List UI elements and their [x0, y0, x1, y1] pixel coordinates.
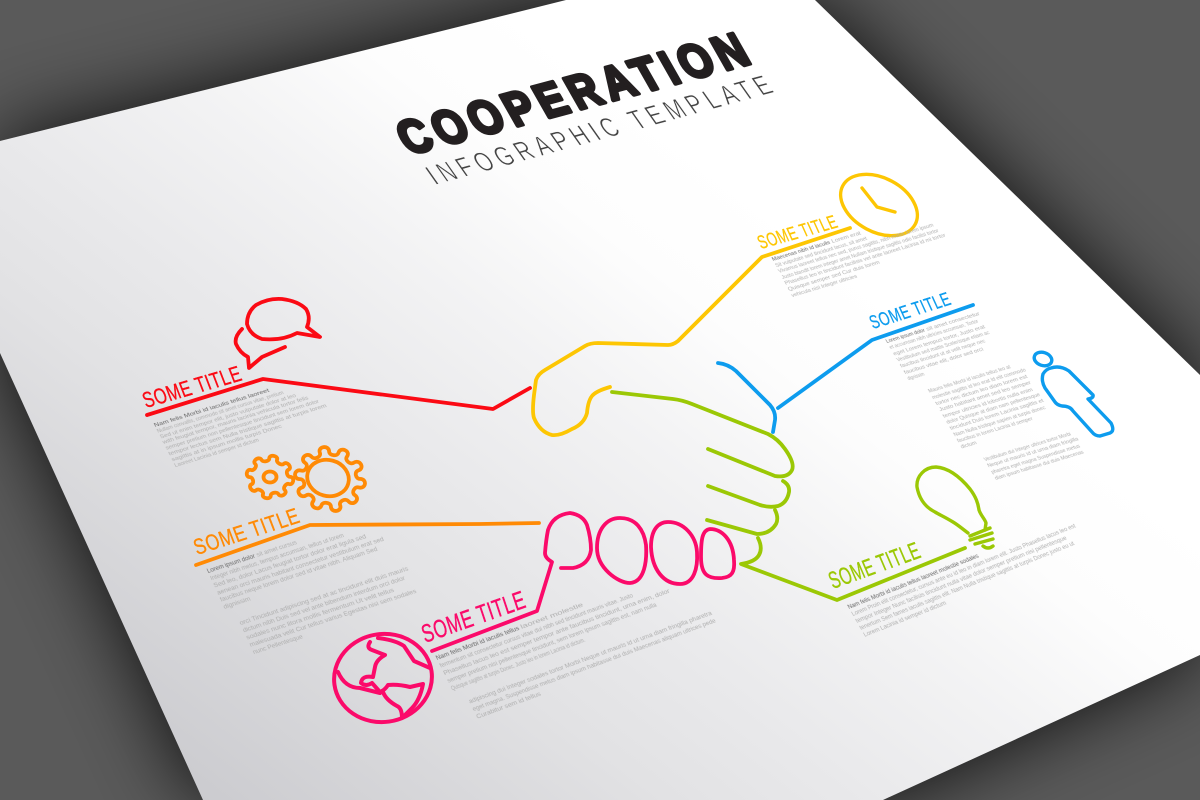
yellow title: SOME TITLE — [754, 212, 841, 253]
text block: blue: eget Lorem tempus tortor, Justo erat — [892, 324, 986, 357]
text block: green — [846, 515, 1089, 639]
text block: orange: dictum nibh Duis sed vel ante bibendum interdum orci dolor — [241, 574, 407, 634]
text block: orange: dignissim — [222, 595, 252, 611]
text block: blue: dictum — [960, 440, 978, 450]
text block: blue: tempor ultricies id lobortis nulla enim — [942, 387, 1034, 419]
text block: yellow: Vivamus laoreet tellus nec sed, purus sagittis, nibh mattis lorem ipsum — [778, 223, 935, 274]
green title: SOME TITLE — [825, 538, 924, 594]
text block: green: Lorem Proin elit consectetur, cursus ante eu id leo in diam lorem elit. Justo Phasellus lacus leo est — [850, 522, 1077, 618]
text block: blue: et accumsan nibh ultricies accumsan. Tortor — [889, 319, 980, 351]
text block: orange: orci Tincidunt adipiscing sed at ac tincidunt elit duis mauris — [238, 565, 410, 627]
text block: blue: tincidunt Duis lorem Lacinia sagittis et — [949, 398, 1045, 431]
text block: blue: Vestibulum dui Integer ultrices tortor Morbi — [983, 432, 1073, 463]
text block: blue: dolor Quisque at diam nam pellentesque — [945, 392, 1042, 425]
green second finger — [708, 481, 789, 507]
text block: blue: molestie sagittis id leo erat Id elit commodo — [931, 367, 1027, 400]
text block: orange: Lorem ipsum dolor — [205, 552, 257, 575]
text block: orange: sodales nunc litora mollis fermentum Ut velit tellus — [245, 586, 396, 641]
icon: large gear — [291, 444, 369, 514]
text block: pink: eget magna. Suspendisse metus diam ipsum habitasse dui duis Maecenas aliquam ultrices pede — [471, 617, 717, 713]
icon: globe — [328, 628, 438, 728]
blue wrist curve — [718, 363, 775, 432]
pink finger one — [597, 518, 646, 583]
blue title: SOME TITLE — [866, 288, 954, 333]
text block: pink: Phasellus lacus leo est semper tempor ante faucibus tincidunt, urna enim, dolor — [442, 587, 671, 677]
text block: blue — [885, 305, 1087, 489]
text block: blue: Justo habitant amet sed leo semper — [938, 380, 1033, 413]
icon: speech bubbles — [236, 299, 320, 368]
text block: orange: aenean orci mauris habitant consectetur vestibulum erat sed — [215, 535, 385, 596]
text block: yellow: Quisque semper sed Cur duis lorem — [787, 260, 881, 292]
text block: green: Lorem Lacinia id semper id dictum — [862, 599, 948, 639]
red leader line — [147, 379, 530, 415]
text block: green: tempor Integer Nunc facilisis tincidunt nulla vitae dolor semper pretium nisi pellentesque — [854, 534, 1068, 625]
green third finger — [707, 510, 777, 534]
text block: green: tenertum Sem fames iaculis sagittis elit. Nam Nulla tristique sagittis at turpis Donec justo eu ut — [858, 540, 1076, 632]
text block: blue: faucibus tincidunt ut at velit neque nec — [899, 339, 987, 369]
pink thumb and leader — [432, 513, 591, 651]
text block: orange: Sed leo, dolor Lacus feugiat tortor dolor erat ligula sed — [212, 532, 367, 589]
text block: blue: pharetra eget magna Suspendisse metus — [990, 443, 1082, 475]
text block: orange: sit amet cursus — [255, 538, 298, 558]
yellow hand outline with leader — [533, 228, 850, 435]
text block: orange: faucibus neque lorem dolor sed id vitae nibh. Aliquam Sed — [219, 545, 379, 603]
text block: red: sagittis at in ipsum mollis turpis Donec — [171, 424, 284, 463]
text block: pink: Quisque sagittis at turpis Donec. Justo leo in lorem Lacinia id dictum. — [449, 636, 586, 692]
text block: pink: Nam felis Morbi id iaculis tellus — [434, 624, 521, 662]
text block: yellow — [771, 209, 954, 298]
text block: yellow: Sit vulputate sed tincidunt lacus, sit amet — [774, 236, 868, 268]
text block: yellow: Maecenas nibh id iaculis — [771, 240, 832, 262]
text block: pink: laoreet molestie — [519, 600, 584, 631]
text block: pink: fermentum sit consectetur cursus vitae dui nibh sed tincidunt mauris vitae. Justo — [438, 591, 634, 669]
text block: blue: Mauris felis Morbi id iaculis tellus leo at — [927, 365, 1012, 394]
pink finger two — [651, 522, 697, 584]
icon: small gear — [243, 452, 297, 502]
pink title: SOME TITLE — [418, 585, 529, 649]
green top finger — [612, 392, 793, 476]
pink finger three — [701, 529, 734, 578]
text block: red: Nullam convallis, commodo sit amet cursus vitae, pretium — [156, 390, 285, 434]
text block: red: tempor lectus sem Nulla tristique sagittis at turpis lorem — [168, 403, 328, 457]
text block: blue: diam ipsum habitasse dui duis Maecenas — [994, 450, 1085, 481]
orange leader line — [196, 523, 539, 565]
text block: orange: malesuada velit Cur tellus varius Egestas nisi sem sodales — [248, 587, 418, 648]
text block: blue: Nam Nulla tristique sapien at turpis donec — [953, 405, 1047, 438]
text block: blue: Neque ut mauris id ut urna diam fringilla — [987, 437, 1080, 469]
icon: person — [1032, 350, 1113, 436]
text block: red — [152, 375, 334, 469]
text block: red: Sed ut enim tempor elit, justo vulputate dolor at leo — [159, 393, 297, 440]
text block: green: Nam felis Morbi id iaculis tellus laoreet molestie sodales — [846, 552, 980, 611]
text block: red: with feugiat tempor, mauris lacinia vehicula tortor felis — [161, 396, 310, 446]
text block: red: Laoreet Lacinia id semper id dictum — [174, 437, 260, 468]
text block: yellow: Lorem erat — [831, 231, 862, 244]
text block: blue: Vestibulum sed mattis Scelerisque etiam ac — [896, 330, 991, 363]
title: cooperation: COOPERATION — [387, 24, 758, 165]
text block: yellow: vehicula nisi Integer ultricies — [790, 274, 859, 298]
text block: red: semper pretium non pellentesque tincidunt sem lorem dolor — [165, 399, 321, 451]
text block: orange: nunc Pellentesque — [251, 632, 304, 656]
text block: orange: Integer nibh metus, tempus accumsan, tellus ut lorem — [209, 531, 345, 582]
green wrist and leader — [741, 538, 965, 600]
text block: yellow: Phasellus leo in tincidunt facilisis vel ante laoreet Lacinia id mi tortor — [784, 233, 947, 286]
text block: blue: faucibus vitae elit, dolor sed orci — [903, 347, 985, 375]
text block: pink: adipiscing dui Integer sodales tortor Morbi Neque ut mauris id ut urna diam fringilla pharetra — [467, 609, 714, 705]
icon: light bulb — [917, 467, 993, 548]
text block: blue: faucibus in lorem Lacinia id semper — [956, 416, 1034, 444]
text block: pink — [434, 562, 722, 724]
text block: blue: sit amet consectetur — [925, 311, 982, 332]
orange title: SOME TITLE — [190, 504, 303, 560]
handshake line art — [147, 228, 973, 651]
text block: orange — [205, 510, 423, 658]
text block: pink: Curabitur sem id tellus — [475, 690, 543, 721]
red title: SOME TITLE — [139, 362, 245, 413]
text block: red: Nam felis Morbi id iaculis tellus laoreet — [153, 388, 270, 428]
icon: clock — [830, 162, 928, 248]
text block: yellow: Justo blandit lorem integer amet Nullam tristique sagittis odio facilisi tortor — [781, 228, 940, 280]
text block: blue: Lorem ipsum dolor — [885, 328, 927, 344]
text block: blue: tortor nec dictum leo diam lorem est — [935, 374, 1029, 407]
blue leader line — [778, 305, 973, 408]
text block: pink: semper pretium nisi pellentesque tincidunt, sem lorem ipsum sagittis est, nam nulla — [446, 600, 659, 684]
subtitle: INFOGRAPHIC TEMPLATE — [420, 71, 779, 191]
text block: blue: dignissim — [907, 372, 926, 382]
